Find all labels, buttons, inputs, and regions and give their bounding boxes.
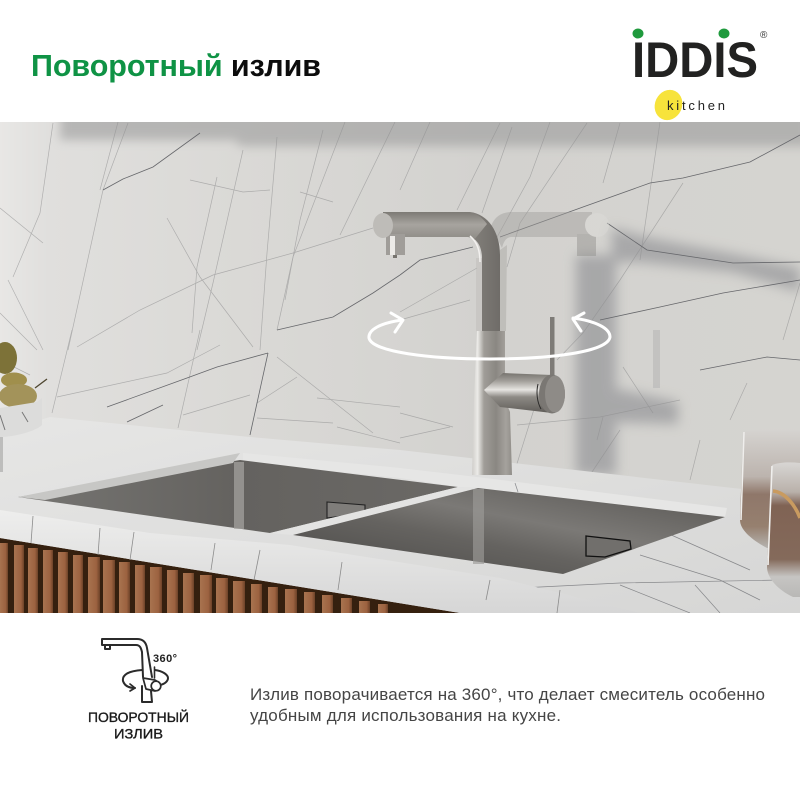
counter front edge (0, 510, 560, 613)
ghost post right (500, 245, 507, 331)
logo green dots (632, 28, 730, 38)
registered mark: ® (760, 30, 768, 41)
bowl pedestal (0, 437, 3, 472)
dark veins (103, 133, 800, 435)
kitchen label: kitchen (667, 98, 725, 113)
shadow band at top of wall (56, 122, 800, 150)
ghost post left (476, 258, 482, 331)
icon base (142, 686, 152, 702)
left sink basin (18, 453, 458, 533)
handle body (484, 373, 552, 413)
marble bowl (0, 402, 42, 437)
spout inner highlight (470, 236, 480, 262)
orange slice (773, 491, 800, 518)
photo: kitchen sink with rotating faucet (0, 110, 800, 613)
aerator (386, 234, 405, 255)
left arrowhead (391, 313, 403, 332)
back glass (740, 441, 800, 548)
counter veins (515, 483, 780, 613)
icon lever (154, 667, 156, 678)
right sink basin (293, 488, 725, 574)
right basin overflow (586, 536, 631, 557)
lever shadow (653, 330, 660, 388)
veins on the wall (0, 122, 800, 480)
back glass edge (741, 432, 744, 520)
icon rotation arrow (123, 670, 168, 688)
bowl with pears (0, 342, 47, 472)
front glass edge (768, 466, 772, 565)
marble wall (0, 110, 800, 502)
logo: IDDIS kitchen (632, 28, 768, 125)
description text: удобным для использования на кухне. (250, 706, 561, 725)
front glass (767, 462, 800, 597)
icon: rotating faucet (102, 639, 168, 702)
divider between basins (270, 487, 458, 533)
left basin marble reflection (18, 453, 240, 500)
ghost rotated spout (476, 212, 609, 331)
rotation arrow (369, 313, 610, 359)
wooden slat front (0, 538, 460, 613)
yellow spot (650, 85, 687, 125)
ghost spout cap (585, 213, 609, 237)
faucet shadow (576, 228, 800, 475)
spout arm (383, 212, 487, 240)
handle end cap (539, 374, 565, 414)
icon faucet outline (102, 639, 152, 677)
title: Поворотный излив (31, 49, 321, 83)
spout cap (373, 213, 393, 238)
marble countertop (0, 417, 800, 613)
lever (550, 317, 554, 377)
right arrowhead (573, 313, 584, 331)
pears (0, 342, 37, 408)
icon caption: ИЗЛИВ (114, 726, 163, 742)
ghost aerator (577, 234, 596, 256)
glasses (740, 429, 800, 597)
icon label 360: 360° (153, 653, 177, 665)
counter rim behind basins (509, 485, 727, 517)
upper pull-out post (468, 212, 500, 331)
description text: Излив поворачивается на 360°, что делает смеситель особенно (250, 685, 765, 704)
pear stem (35, 379, 47, 388)
base post (472, 331, 512, 475)
logo wordmark: IDDIS (632, 32, 758, 88)
faucet (373, 212, 565, 475)
left basin highlight (234, 462, 244, 529)
left basin overflow (327, 502, 365, 518)
icon handle (143, 678, 159, 691)
icon caption: ПОВОРОТНЫЙ (88, 708, 189, 725)
icon aerator (105, 645, 110, 649)
right basin reflection (473, 489, 484, 564)
